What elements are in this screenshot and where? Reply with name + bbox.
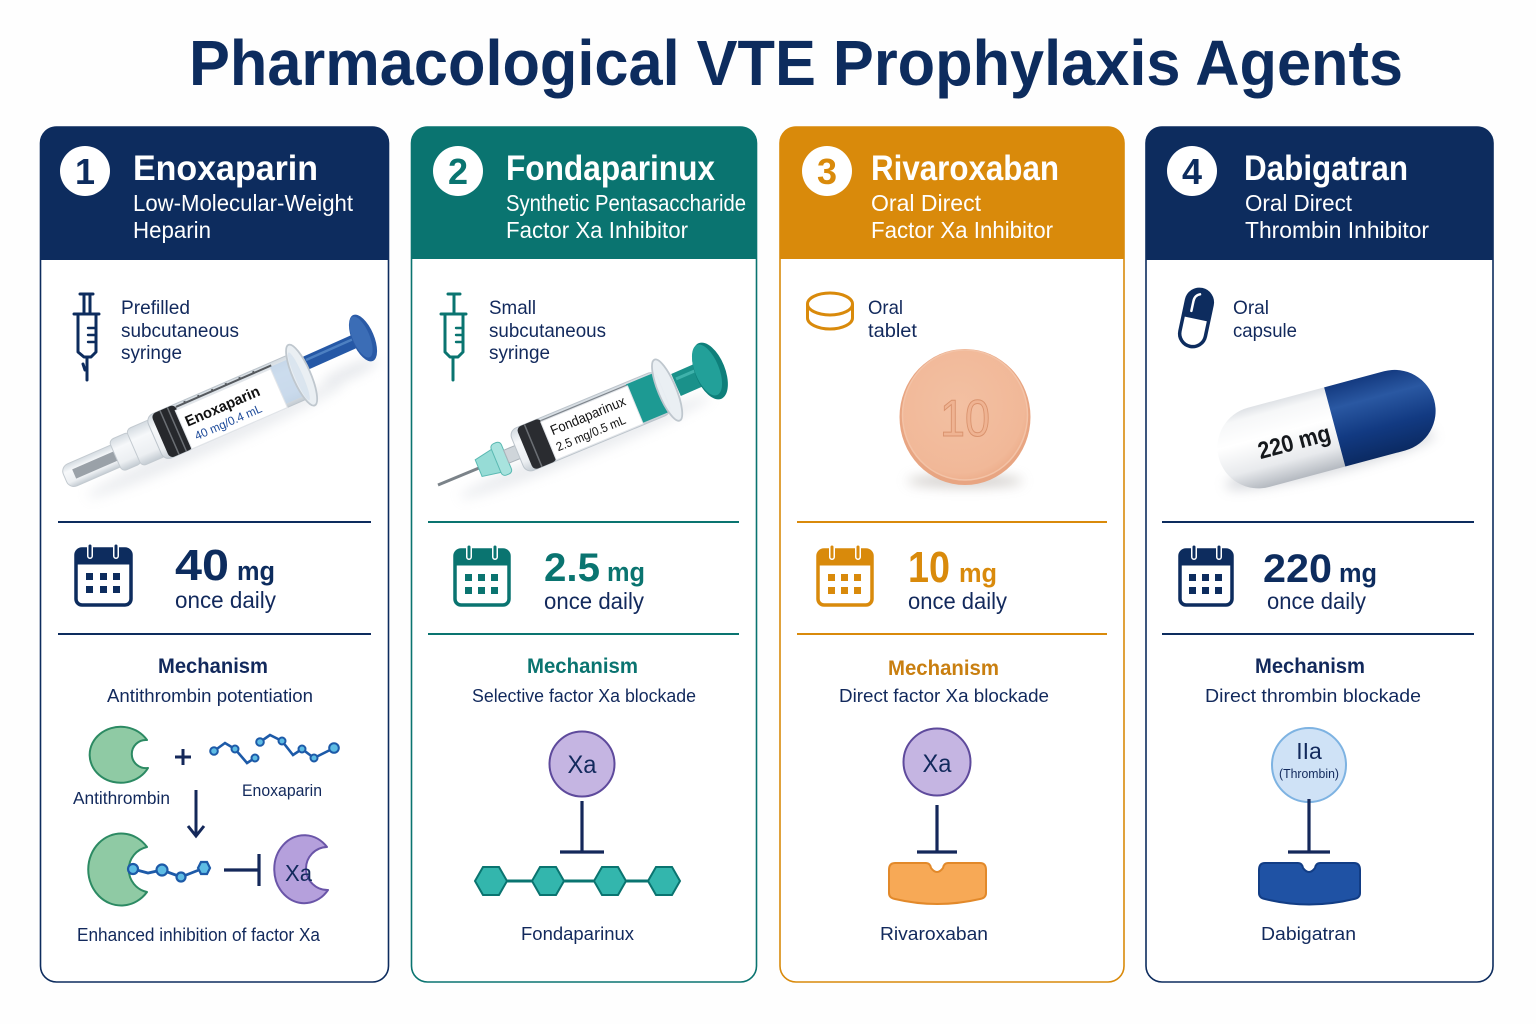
delivery form text: Oral	[1233, 297, 1269, 319]
mechanism diagram: IIa blocked by dabigatran	[1259, 728, 1360, 944]
mechanism text: Selective factor Xa blockade	[472, 685, 696, 706]
delivery form text: capsule	[1233, 320, 1297, 342]
plus sign	[175, 749, 191, 765]
delivery form text: Small	[489, 297, 536, 319]
dose: mg	[959, 558, 997, 588]
antithrombin: Antithrombin	[73, 788, 170, 808]
delivery form text: subcutaneous	[489, 320, 606, 342]
dose: 2.5	[544, 546, 600, 590]
delivery form text: syringe	[121, 342, 182, 364]
label: Dabigatran	[1261, 923, 1356, 944]
icon: syringe	[74, 294, 99, 380]
syringe label	[547, 393, 634, 454]
factor Xa	[550, 732, 614, 796]
number badge	[802, 146, 852, 196]
enoxaparin chain: Enoxaparin	[242, 782, 322, 800]
syringe label: Enoxaparin	[183, 383, 263, 430]
rivaroxaban block	[889, 863, 986, 904]
plunger rod	[306, 338, 362, 363]
icon: calendar	[455, 547, 509, 605]
icon: calendar	[818, 547, 872, 605]
drug class	[133, 190, 354, 243]
drug class: Synthetic Pentasaccharide	[506, 190, 746, 216]
dose: mg	[607, 557, 645, 587]
antithrombin	[73, 727, 170, 808]
icon: capsule	[1177, 287, 1215, 349]
card frame	[1146, 127, 1493, 982]
bound complex	[88, 834, 210, 906]
mechanism text	[839, 656, 1049, 706]
card header	[780, 127, 1124, 259]
panel: Enoxaparin	[40, 127, 389, 982]
mechanism text	[107, 654, 313, 706]
number badge	[60, 146, 110, 196]
number badge: 1	[75, 151, 95, 192]
mechanism text: Mechanism	[527, 654, 638, 678]
inhibition bar	[560, 801, 604, 852]
drug name: Rivaroxaban	[871, 149, 1059, 188]
fondaparinux hexagon chain	[475, 867, 680, 895]
mechanism text	[472, 654, 696, 706]
drug name: Enoxaparin	[133, 149, 318, 188]
mechanism text: Direct factor Xa blockade	[839, 685, 1049, 706]
plunger rod	[676, 371, 708, 385]
card header	[411, 127, 757, 259]
factor Xa: Xa	[285, 860, 312, 886]
number badge: 2	[448, 151, 468, 192]
factor Xa: Xa	[922, 750, 952, 778]
label: Rivaroxaban	[880, 923, 988, 944]
factor Xa: Xa	[568, 751, 597, 779]
mechanism diagram: Xa blocked by rivaroxaban	[880, 728, 988, 944]
caption: Enhanced inhibition of factor Xa	[77, 924, 321, 945]
drug name: Fondaparinux	[506, 149, 715, 188]
tablet imprint: 10	[940, 390, 990, 448]
drug class: Oral Direct	[871, 190, 982, 216]
syringe label: Fondaparinux	[548, 393, 628, 438]
drug class	[871, 190, 1053, 243]
small syringe illustration	[425, 338, 735, 515]
card header	[40, 127, 389, 260]
delivery form text: subcutaneous	[121, 320, 239, 342]
mechanism diagram: antithrombin potentiation	[73, 727, 339, 945]
drug name: Dabigatran	[1244, 149, 1408, 188]
inhibition bar	[917, 805, 957, 852]
icon: calendar	[76, 546, 131, 605]
syringe label: 2.5 mg/0.5 mL	[554, 413, 628, 454]
dose: 40	[175, 541, 229, 590]
syringe label: 40 mg/0.4 mL	[193, 401, 264, 443]
capsule illustration	[1208, 361, 1445, 499]
number badge	[433, 146, 483, 196]
card frame	[40, 127, 388, 982]
drug class: Heparin	[133, 217, 211, 243]
dabigatran block	[1259, 863, 1360, 904]
dose: once daily	[1267, 588, 1366, 614]
delivery form text	[121, 297, 239, 364]
panel: Dabigatran	[1146, 127, 1493, 982]
number badge	[1167, 146, 1217, 196]
factor Xa	[274, 835, 328, 903]
delivery form text	[489, 297, 606, 364]
inhibition bar	[224, 854, 259, 886]
icon: syringe	[441, 294, 466, 380]
factor Xa	[904, 728, 970, 796]
delivery form text: tablet	[868, 320, 918, 342]
number badge: 3	[817, 151, 837, 192]
mechanism text: Mechanism	[888, 656, 999, 680]
dose: once daily	[544, 588, 644, 614]
title: Pharmacological VTE Prophylaxis Agents	[189, 27, 1403, 99]
dose: 220	[1263, 547, 1332, 591]
factor IIa: (Thrombin)	[1279, 766, 1339, 781]
panel: Rivaroxaban	[780, 127, 1124, 982]
mechanism text: Mechanism	[1255, 654, 1365, 678]
inhibition bar	[1288, 799, 1330, 852]
card frame	[780, 127, 1124, 982]
icon: calendar	[1180, 547, 1232, 605]
delivery form text: Prefilled	[121, 297, 190, 319]
drug class: Oral Direct	[1245, 190, 1353, 216]
delivery form text	[1233, 297, 1297, 342]
mechanism text: Direct thrombin blockade	[1205, 685, 1421, 706]
tablet illustration	[900, 349, 1030, 487]
icon: tablet	[808, 293, 852, 329]
dose: mg	[237, 556, 275, 586]
enoxaparin chain	[210, 735, 339, 800]
card header	[1146, 127, 1493, 260]
dose: once daily	[175, 587, 276, 613]
dose	[1263, 547, 1377, 614]
plunger cap	[343, 311, 383, 365]
prefilled syringe illustration	[52, 311, 383, 508]
drug class	[1245, 190, 1429, 243]
panel: Fondaparinux	[411, 127, 757, 982]
mechanism diagram: Xa blocked by fondaparinux	[475, 732, 680, 944]
dose: once daily	[908, 588, 1007, 614]
drug class: Factor Xa Inhibitor	[871, 217, 1053, 243]
number badge: 4	[1182, 151, 1202, 192]
plunger cap	[685, 338, 735, 404]
drug class: Low-Molecular-Weight	[133, 190, 354, 216]
dose	[175, 541, 276, 613]
delivery form text: syringe	[489, 342, 550, 364]
drug class	[506, 190, 746, 243]
drug class: Thrombin Inhibitor	[1245, 217, 1429, 243]
card frame	[412, 127, 756, 982]
dose	[908, 543, 1007, 614]
capsule imprint: 220 mg	[1255, 420, 1334, 465]
delivery form text	[868, 297, 918, 342]
mechanism text	[1205, 654, 1421, 706]
factor IIa	[1272, 728, 1346, 802]
factor IIa: IIa	[1296, 738, 1322, 764]
label: Fondaparinux	[521, 923, 635, 944]
dose: 10	[908, 543, 950, 592]
arrow	[188, 790, 204, 836]
dose	[544, 546, 645, 614]
mechanism text: Antithrombin potentiation	[107, 685, 313, 706]
mechanism text: Mechanism	[158, 654, 268, 678]
delivery form text: Oral	[868, 297, 903, 319]
drug class: Factor Xa Inhibitor	[506, 217, 688, 243]
dose: mg	[1339, 558, 1377, 588]
